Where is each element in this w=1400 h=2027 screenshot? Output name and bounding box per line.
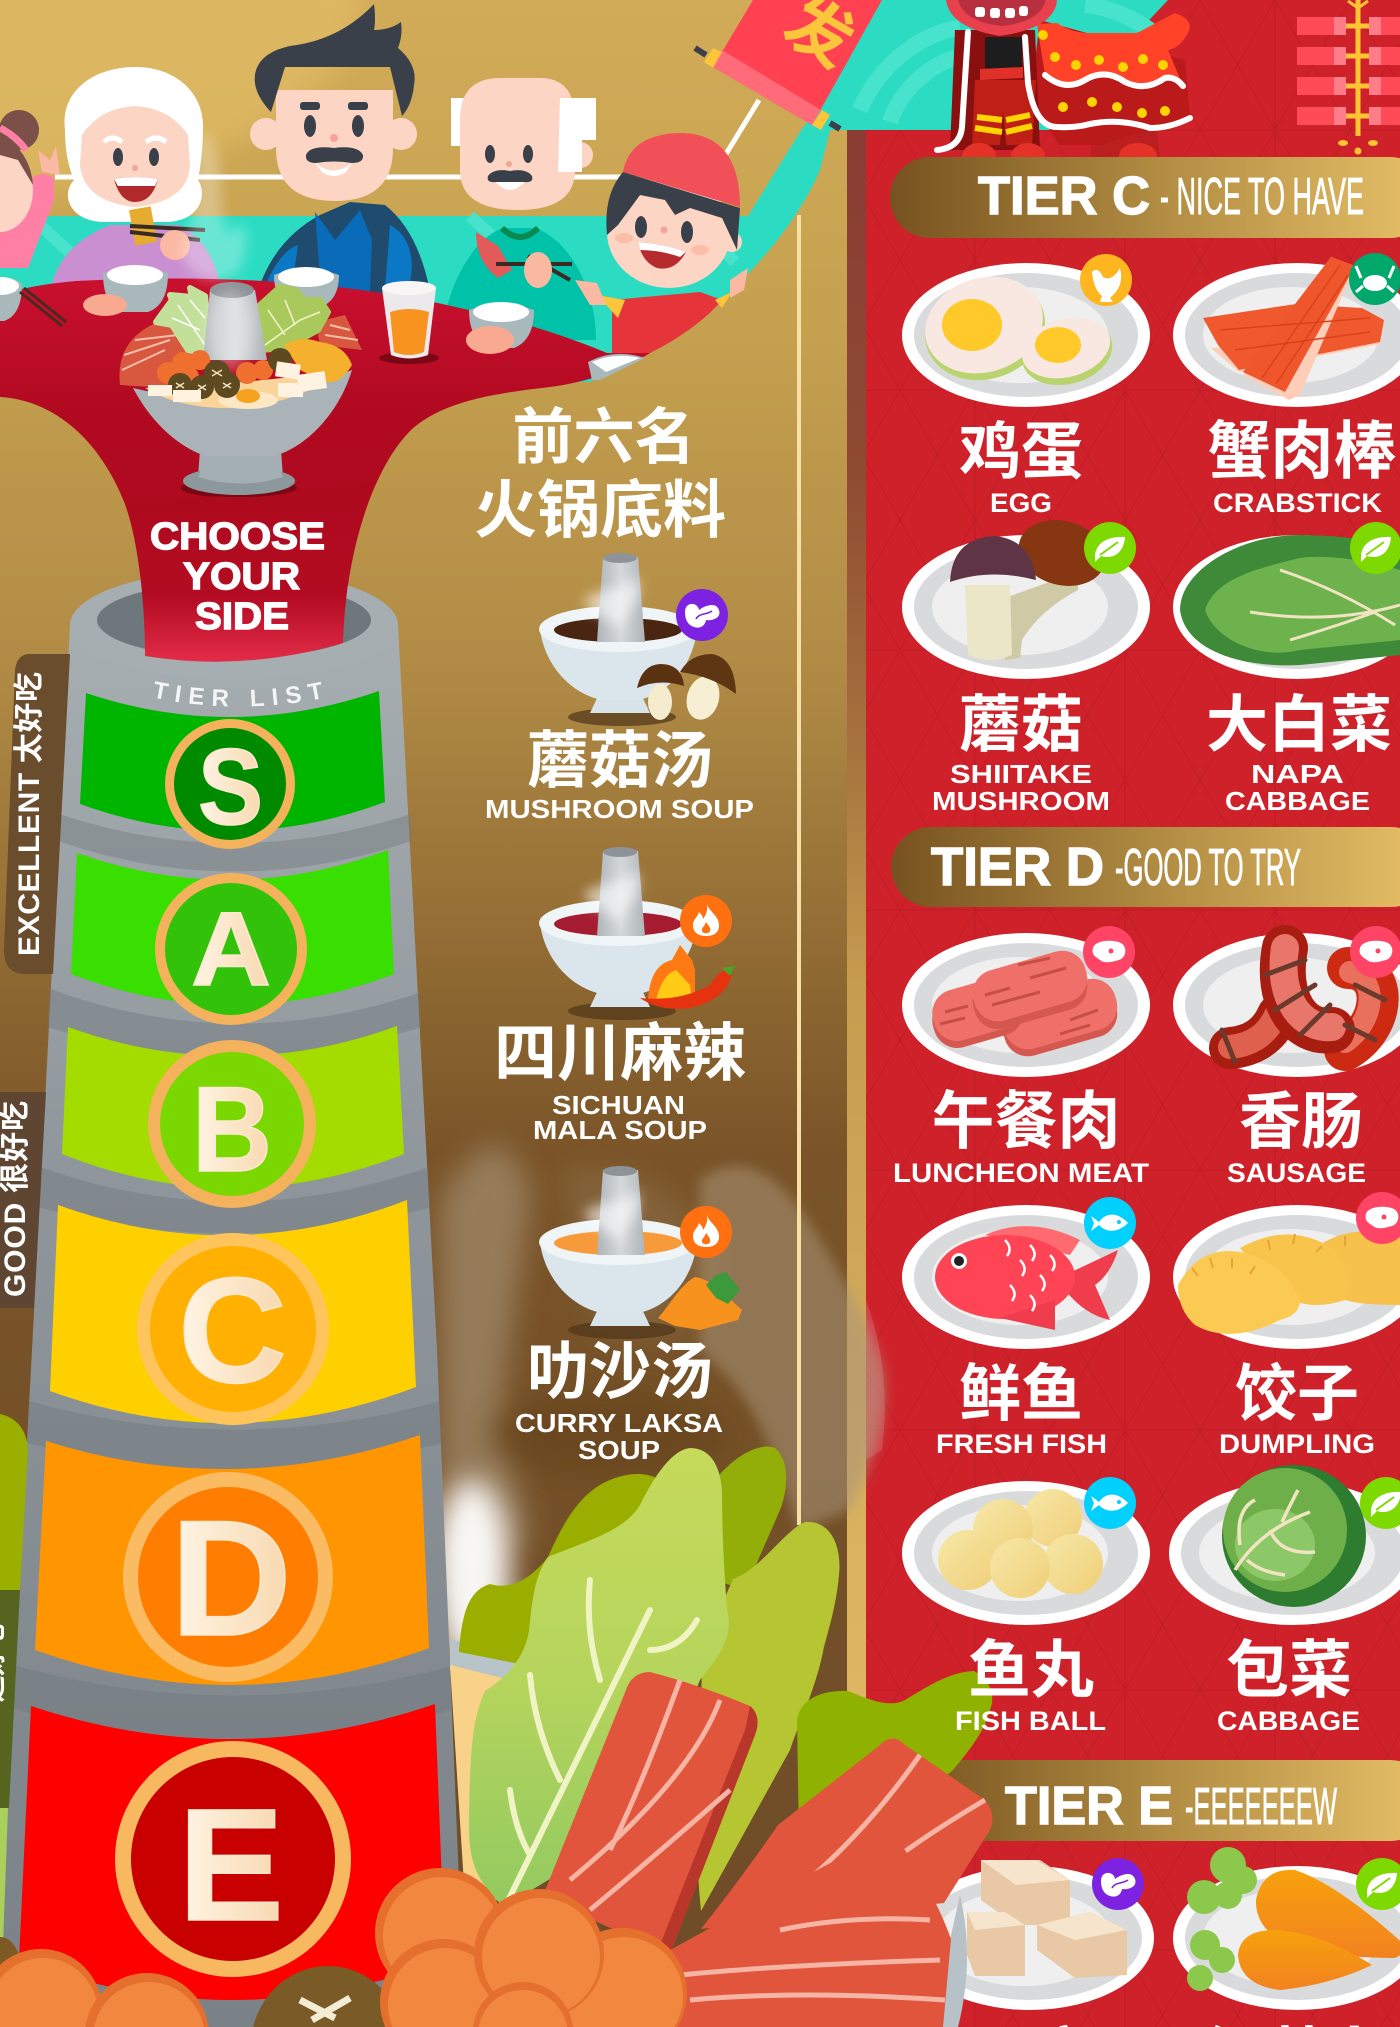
plate <box>902 1205 1150 1349</box>
english line one: SHIITAKE <box>950 759 1092 789</box>
plate <box>902 263 1150 407</box>
food: fresh fish <box>902 1197 1150 1459</box>
tower body <box>0 625 465 2027</box>
food: napa cabbage <box>1173 522 1400 816</box>
food: shiitake <box>902 511 1150 816</box>
side tag: good <box>0 1092 46 1308</box>
heading: top six soup bases: 前六名 <box>512 403 696 471</box>
table items <box>0 265 645 498</box>
mushrooms <box>950 511 1113 660</box>
steam clouds behind soups <box>434 1146 886 1670</box>
english line one: CURRY LAKSA <box>515 1408 723 1438</box>
tofu cubes <box>967 1860 1127 1978</box>
teal backdrop <box>0 0 1168 382</box>
badge S: S <box>198 726 263 847</box>
icon: bean badge <box>1092 1858 1144 1910</box>
plate <box>902 535 1150 679</box>
plate <box>1173 1205 1400 1349</box>
fish <box>935 1226 1118 1330</box>
food: fish ball <box>902 1477 1150 1625</box>
food: tofu <box>906 1858 1154 2027</box>
english name: CRABSTICK <box>1213 488 1383 518</box>
veins <box>505 1580 697 1907</box>
heading: choose your side: YOUR <box>183 556 300 598</box>
heading: top six soup bases: 火锅底料 <box>474 476 726 546</box>
badge D: D <box>170 1486 292 1670</box>
food: carrot <box>1173 1847 1400 2027</box>
person: grandfather <box>442 78 596 340</box>
left edge leaf and lower tag <box>0 1414 28 1993</box>
meat right <box>318 315 362 350</box>
carrots <box>1187 1847 1400 1991</box>
english name: EGG <box>990 488 1052 518</box>
name: 午餐肉 <box>932 1087 1120 1157</box>
cabbage head <box>1222 1465 1366 1607</box>
broth <box>145 370 345 408</box>
badge C <box>137 1233 329 1425</box>
english line two: CABBAGE <box>1225 786 1370 816</box>
tier E header: TIER E <box>1005 1776 1173 1836</box>
meat slices <box>927 945 1123 1062</box>
badge E <box>115 1741 351 1977</box>
foreground: lettuce <box>459 1447 992 1911</box>
name: 香肠 <box>1239 1088 1363 1157</box>
name: 大白菜 <box>1206 691 1392 760</box>
badge S <box>165 719 295 849</box>
foreground: orange balls and mushroom <box>0 1868 687 2027</box>
name: 四川麻辣 <box>494 1019 746 1089</box>
icon: fish badge <box>1084 1477 1136 1529</box>
food label: fish ball <box>955 1636 1106 1736</box>
tier C band <box>50 1200 416 1423</box>
hotpot centrepiece <box>119 282 362 498</box>
slice one <box>542 1672 758 1954</box>
mushrooms <box>637 654 736 723</box>
tier tower <box>3 580 458 2027</box>
foreground: bowl and broth <box>450 1639 967 2027</box>
name: 鸡蛋 <box>959 418 1083 487</box>
egg halves <box>912 262 1120 395</box>
tier list arc <box>150 695 338 707</box>
slice two <box>701 1738 993 1929</box>
dumplings <box>1178 1231 1400 1334</box>
food: dumpling <box>1173 1192 1400 1459</box>
english name: DUMPLING <box>1219 1429 1375 1459</box>
rice bowls <box>0 265 645 380</box>
icon: fire badge <box>680 895 732 947</box>
icon: bean badge <box>676 589 728 641</box>
hotpot base redraw over funnel <box>181 465 297 497</box>
english line two: MALA SOUP <box>533 1115 707 1145</box>
banner scroll <box>695 0 882 130</box>
soup: curry laksa <box>515 1166 742 1465</box>
name: 包菜 <box>1226 1636 1352 1706</box>
panel: red tier panel <box>847 0 1400 2027</box>
name: 蘑菇 <box>959 691 1083 760</box>
vertical gold divider <box>797 215 801 1525</box>
leaf far right <box>797 1671 992 1900</box>
icon: leaf badge <box>1360 1477 1400 1529</box>
heading: choose your side: CHOOSE <box>150 516 325 558</box>
tofu <box>148 361 327 402</box>
fish balls <box>938 1489 1103 1598</box>
leaf main <box>469 1448 729 1907</box>
dumpling pile <box>284 339 352 382</box>
tier C header: TIER C <box>978 166 1150 226</box>
plate <box>1173 933 1400 1077</box>
icon: chicken badge <box>1080 254 1132 306</box>
english name: FRESH FISH <box>936 1429 1107 1459</box>
tier B band <box>62 1026 404 1188</box>
leaf right <box>697 1522 839 1911</box>
english name: SAUSAGE <box>1227 1158 1366 1188</box>
person: boy <box>575 133 748 353</box>
band shadows <box>16 814 451 1714</box>
hotpot bowl <box>539 1166 697 1339</box>
tier D header: TIER D <box>931 837 1104 897</box>
tower opening <box>97 582 371 658</box>
food: sausage <box>1173 926 1400 1188</box>
family around the table <box>0 4 748 353</box>
person: grandmother <box>49 67 222 310</box>
badge A: A <box>191 891 271 1008</box>
chili and flame <box>640 945 735 1009</box>
heading: choose your side: SIDE <box>195 596 289 638</box>
english name: CABBAGE <box>1217 1706 1360 1736</box>
english name: MUSHROOM SOUP <box>485 794 754 824</box>
lettuce right <box>260 287 328 350</box>
heading: choose your side <box>150 516 325 638</box>
hotpot bowl <box>539 553 697 726</box>
icon: leaf badge <box>1350 522 1400 574</box>
crab sticks <box>1203 257 1384 400</box>
food: luncheon meat <box>893 926 1150 1188</box>
icon: meat badge <box>1083 926 1135 978</box>
tier D band <box>35 1435 429 1685</box>
badge D <box>123 1472 333 1682</box>
curry powder <box>658 1272 742 1330</box>
person: girl <box>0 110 60 268</box>
plate <box>1173 1866 1400 2010</box>
plate <box>1169 1481 1400 1625</box>
side tag: excellent: EXCELLENT 太好吃 <box>13 672 46 956</box>
mushrooms <box>168 348 292 399</box>
chimney <box>203 290 267 360</box>
english line two: MUSHROOM <box>932 786 1110 816</box>
english line two: SOUP <box>578 1435 660 1465</box>
heading: top six soup bases <box>474 403 726 546</box>
mushroom <box>251 1966 405 2027</box>
tier S band <box>80 691 385 831</box>
soup: sichuan mala <box>494 847 746 1145</box>
leaf back left <box>459 1474 660 1680</box>
icon: fish badge <box>1084 1197 1136 1249</box>
badge B: B <box>192 1061 272 1197</box>
name: 蟹肉棒 <box>1208 417 1396 487</box>
person: father <box>249 4 436 345</box>
slice three <box>663 1840 951 2027</box>
food: cabbage <box>1169 1465 1400 1736</box>
firecrackers <box>1297 0 1400 154</box>
icon: meat badge <box>1350 926 1400 978</box>
icon: fire badge <box>680 1206 732 1258</box>
foreground: sliced meat <box>542 1672 993 2027</box>
meat left <box>119 322 205 388</box>
funnel over tower opening <box>125 482 374 662</box>
badge A <box>155 873 307 1025</box>
icon: crab badge <box>1349 253 1400 305</box>
side tag: excellent <box>4 654 70 974</box>
badge B <box>148 1040 316 1208</box>
tier D header <box>891 827 1400 907</box>
name: 叻沙汤 <box>527 1338 713 1407</box>
name: 鲜鱼 <box>959 1360 1083 1429</box>
tower rim <box>70 570 398 680</box>
name: 饺子 <box>1235 1360 1359 1429</box>
english line one: NAPA <box>1251 759 1344 789</box>
tier E band <box>19 1704 445 2000</box>
badge E: E <box>178 1775 284 1954</box>
white table line <box>55 100 759 177</box>
lettuce left <box>156 288 210 355</box>
sausages <box>1222 948 1385 1062</box>
food label: fish ball: 鱼丸 <box>968 1636 1094 1706</box>
tier A band <box>71 850 394 1005</box>
background: gold panel <box>0 0 866 2027</box>
english line one: SICHUAN <box>552 1090 685 1120</box>
hotpot bowl <box>539 847 697 1020</box>
icon: leaf badge <box>1356 1858 1400 1910</box>
plate <box>902 933 1150 1077</box>
cabbage leaf <box>1180 535 1400 665</box>
plate <box>902 1481 1150 1625</box>
tier E header <box>900 1760 1400 1841</box>
food: egg <box>902 254 1150 518</box>
soup: mushroom <box>485 553 754 824</box>
badge C: C <box>178 1246 287 1414</box>
juice glass <box>379 281 439 364</box>
balls <box>157 350 273 388</box>
leaf back <box>715 1447 786 1590</box>
tier C header <box>890 157 1400 238</box>
icon: leaf badge <box>1084 522 1136 574</box>
plate <box>1173 263 1400 407</box>
food label: fish ball: FISH BALL <box>955 1706 1106 1736</box>
plate <box>1173 535 1400 679</box>
icon: meat badge <box>1356 1192 1400 1244</box>
lion dance figure <box>937 0 1190 169</box>
steam over hotpot <box>180 130 246 280</box>
red table and funnel <box>0 279 650 662</box>
food: crabstick <box>1173 253 1400 518</box>
english name: LUNCHEON MEAT <box>893 1158 1150 1188</box>
plate <box>906 1866 1154 2010</box>
name: 蘑菇汤 <box>527 727 713 796</box>
tier list text: TIER LIST <box>154 681 322 706</box>
